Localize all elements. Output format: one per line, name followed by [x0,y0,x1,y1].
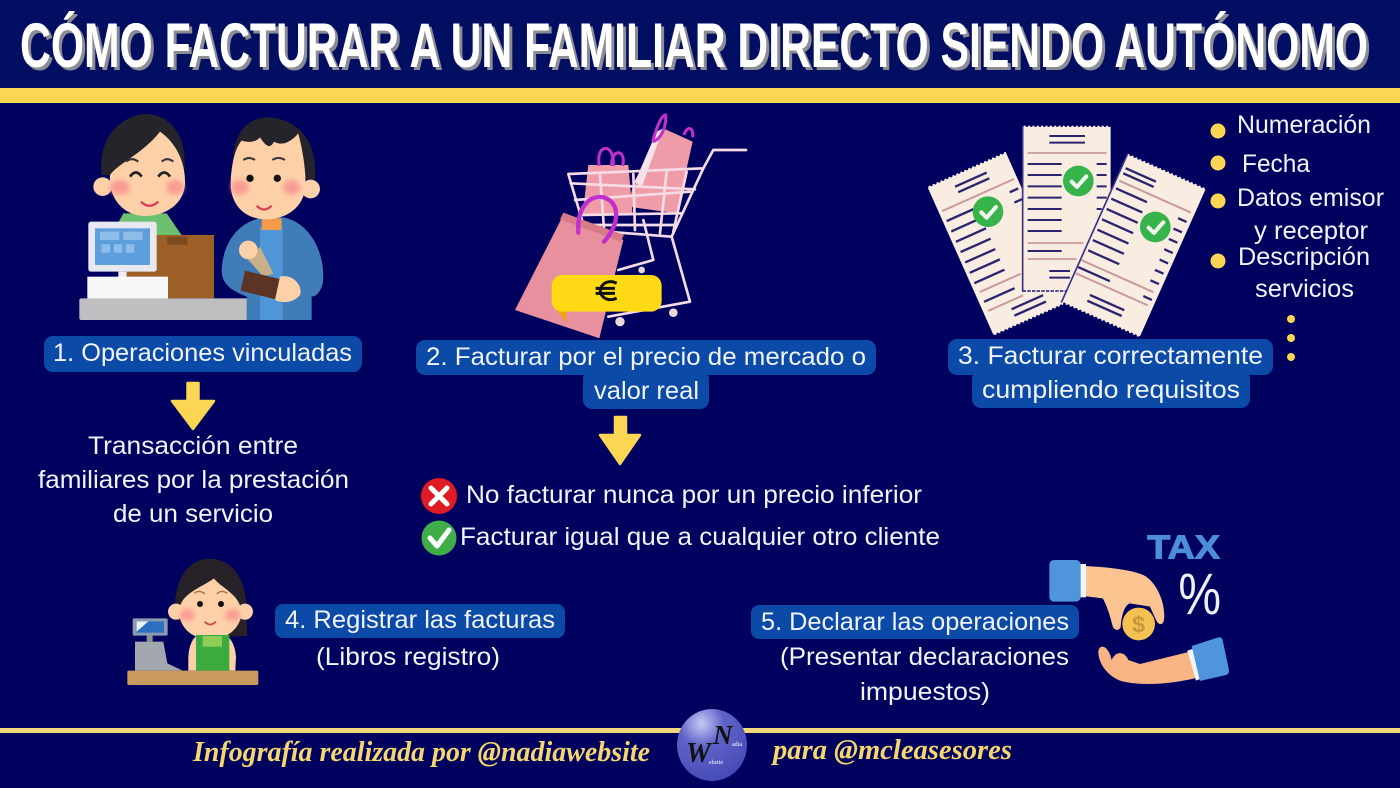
footer credit: Infografía realizada por @nadiawebsite [192,737,650,768]
checklist: invoice requirements: y receptor [1254,217,1368,245]
do: same as other clients: Facturar igual que a cualquier otro cliente [460,523,940,551]
logo: adia [732,742,742,748]
logo: ebsite [709,760,723,766]
icon: box [127,235,214,298]
icon: cashier [93,114,185,237]
checklist: invoice requirements: servicios [1255,275,1354,303]
illustration: shopping cart with bags [515,115,746,338]
back bag right [628,128,693,213]
step 3 badge [948,339,1273,408]
text: step 4 detail: (Libros registro) [316,643,500,671]
text: step 1 definition: Transacción entre [88,432,298,460]
icon: euro price tag [552,275,662,323]
logo: W [686,738,713,769]
icon: customer [222,117,323,320]
text: step 5 detail: (Presentar declaraciones [780,643,1069,671]
receipt right [1061,153,1206,337]
illustration: shop assistant [127,559,258,685]
text: step 1 definition: familiares por la prestación [38,466,349,494]
text: step 1 definition [38,432,349,528]
step 2 badge: valor real [594,377,699,405]
icon: front bag [515,197,624,338]
header yellow bar [0,88,1400,103]
do not: lower price: No facturar nunca por un precio inferior [466,481,922,509]
step 4 badge: 4. Registrar las facturas [285,606,555,634]
step 2 badge: 2. Facturar por el precio de mercado o [426,343,866,371]
footer line [0,728,1400,733]
check icons [973,166,1171,242]
arrow: step 2 [600,417,640,464]
coin: $ [1132,611,1145,637]
upper hand [1049,560,1164,630]
percent sign: % [1178,562,1221,627]
text: step 5 detail [780,643,1069,706]
text: step 5 detail: impuestos) [860,678,990,706]
header band [0,0,1400,88]
step 1 badge: 1. Operaciones vinculadas [53,339,352,367]
footer recipient: para @mcleasesores [771,735,1012,766]
checklist: invoice requirements: Datos emisor [1237,184,1384,212]
step 3 badge: 3. Facturar correctamente [958,342,1263,370]
logo: N [712,720,734,750]
checklist: invoice requirements [1210,111,1384,361]
icon: cash register [79,222,248,320]
assistant [168,559,253,671]
receipt center [1023,126,1111,292]
checklist: invoice requirements: Descripción [1238,243,1370,271]
receipt left [927,152,1072,336]
illustration: three receipts with checks [927,126,1206,337]
lower hand [1098,637,1229,684]
do not: lower price [421,478,922,514]
step 3 badge: cumpliendo requisitos [982,376,1240,404]
arrow: step 1 [172,383,214,429]
step 2 badge [416,340,876,409]
logo [677,709,747,781]
coin [1122,608,1155,640]
text: step 1 definition: de un servicio [113,500,273,528]
label: TAX: TAX [1147,530,1220,567]
checklist: invoice requirements: Fecha [1242,150,1310,178]
illustration: hands, coin and tax [1049,530,1229,684]
icon: cart frame [568,150,746,317]
register [133,618,183,671]
wheels [615,267,678,326]
back bag left [583,165,633,215]
illustration: shop cashier and customer [79,114,323,320]
step 5 badge: 5. Declarar las operaciones [761,608,1069,636]
counter [127,671,258,685]
checklist: invoice requirements: Numeración [1237,111,1371,139]
